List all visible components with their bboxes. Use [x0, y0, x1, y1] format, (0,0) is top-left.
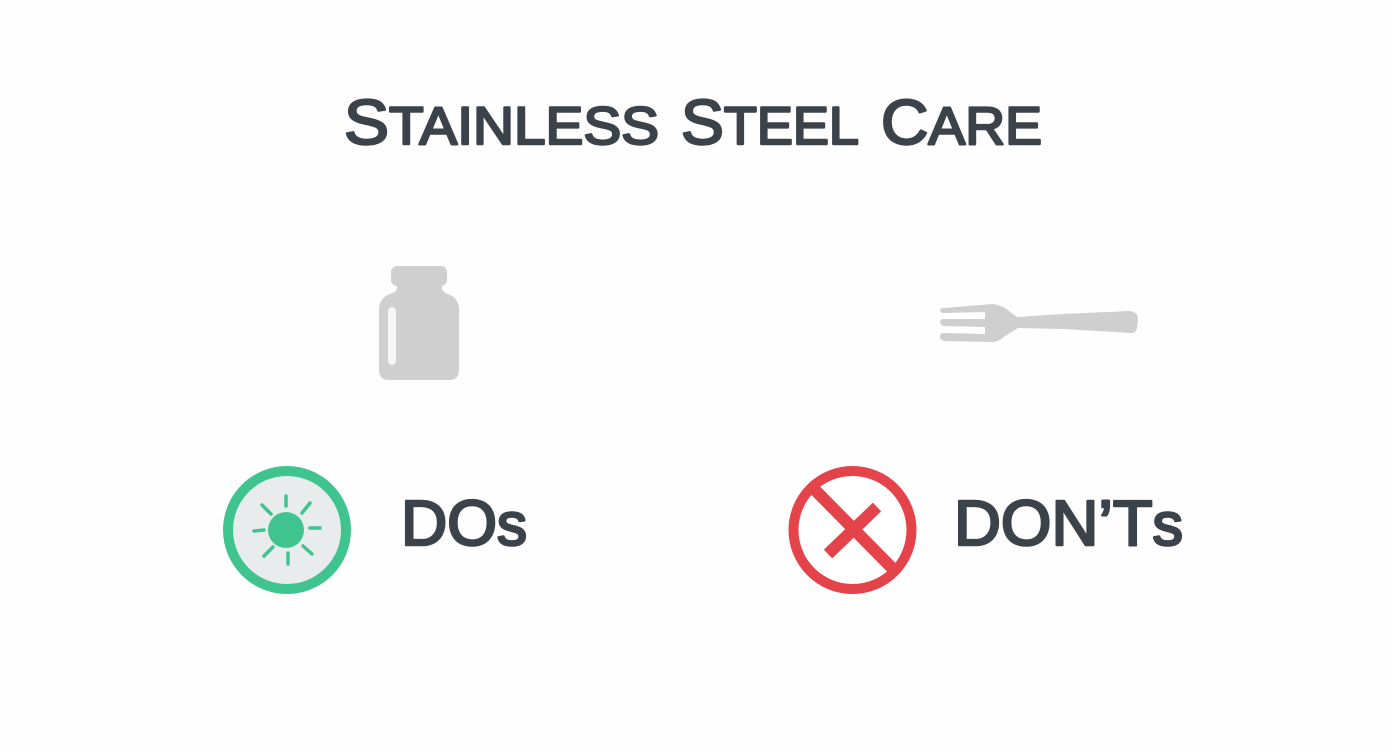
title [344, 88, 1042, 158]
icon: red prohibition cross [794, 471, 912, 589]
icon: jar [379, 266, 459, 380]
heading: DON'Ts: DON’Ts [954, 487, 1183, 559]
icon: green sun badge [228, 471, 346, 589]
title: STAINLESS [344, 88, 659, 158]
title: CARE [881, 88, 1042, 158]
title: STEEL [681, 88, 859, 158]
icon: fork [940, 304, 1138, 342]
heading: DOs: DOs [401, 487, 527, 559]
